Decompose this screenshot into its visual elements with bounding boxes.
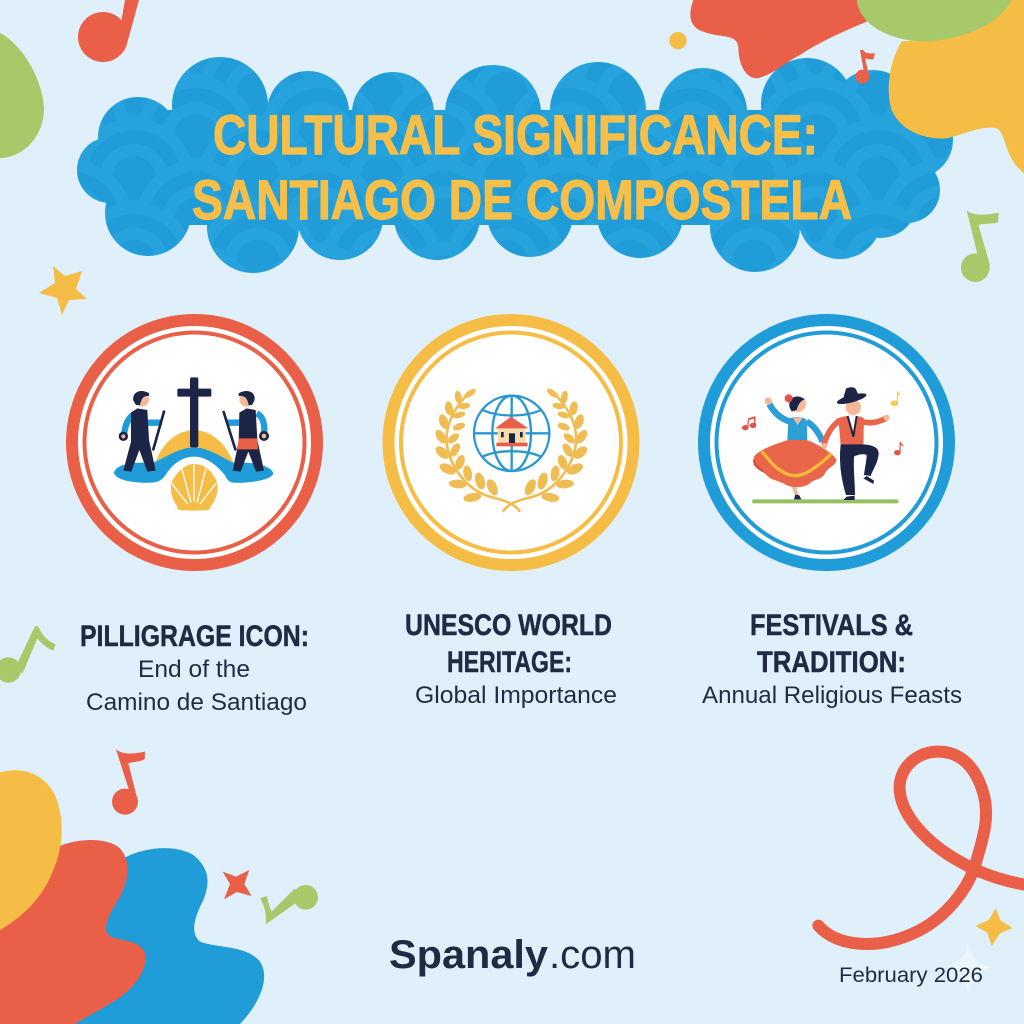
- icon: pilgrims, cross and shell: [114, 377, 273, 511]
- music note: red: [112, 749, 145, 815]
- panel: pilgrimage badge: [66, 314, 323, 571]
- brand: Spanaly.com: Spanaly: [389, 933, 549, 977]
- text block: pilgrimage: End of the: [138, 656, 250, 683]
- icon: laurel right: [503, 387, 590, 512]
- icon: woman dancer: [753, 394, 837, 499]
- ribbon and sparkle: bottom right: [818, 752, 1024, 993]
- text block: pilgrimage: [80, 620, 309, 716]
- music note: top left red: [78, 0, 139, 62]
- icon: laurel left: [433, 387, 520, 512]
- icon: left pilgrim: [119, 391, 164, 472]
- panel: UNESCO badge: [382, 314, 640, 571]
- text block: UNESCO: HERITAGE:: [447, 646, 572, 679]
- text block: UNESCO: [405, 609, 617, 709]
- icon: globe: [474, 396, 549, 471]
- music note: green left: [0, 626, 56, 683]
- brand: Spanaly.com: .com: [549, 933, 636, 977]
- top right colour blobs: [669, 0, 1024, 173]
- brand: Spanaly.com: [389, 933, 636, 977]
- text block: festivals: FESTIVALS &: [750, 609, 913, 642]
- icon: right pilgrim: [224, 391, 269, 472]
- title: SANTIAGO DE COMPOSTELA: [192, 168, 852, 231]
- bottom left colour blobs: [0, 749, 318, 1024]
- text block: pilgrimage: PILLIGRAGE ICON:: [80, 620, 309, 653]
- text block: festivals: [702, 609, 962, 709]
- star: yellow left: [39, 266, 87, 315]
- icon: house: [495, 417, 528, 446]
- text block: UNESCO: Global Importance: [415, 682, 617, 709]
- panel: festivals badge: [698, 314, 955, 571]
- music note: green: [260, 885, 318, 924]
- text block: UNESCO: UNESCO WORLD: [405, 609, 612, 642]
- text block: festivals: TRADITION:: [757, 646, 906, 679]
- title banner: blue cloud: [77, 57, 953, 273]
- music note: green right: [961, 210, 999, 282]
- text block: festivals: Annual Religious Feasts: [702, 682, 962, 709]
- title: CULTURAL SIGNIFICANCE:: [213, 103, 818, 166]
- title: [192, 103, 852, 231]
- icon: music notes: [742, 390, 904, 455]
- date: February 2026: [839, 964, 983, 987]
- star: red sparkle: [223, 870, 252, 899]
- top left green blob: [0, 33, 44, 158]
- icon: man dancer: [821, 387, 890, 500]
- icon: dancing couple: [742, 387, 904, 503]
- text block: pilgrimage: Camino de Santiago: [86, 689, 307, 716]
- icon: globe with house and laurel wreath: [433, 387, 590, 512]
